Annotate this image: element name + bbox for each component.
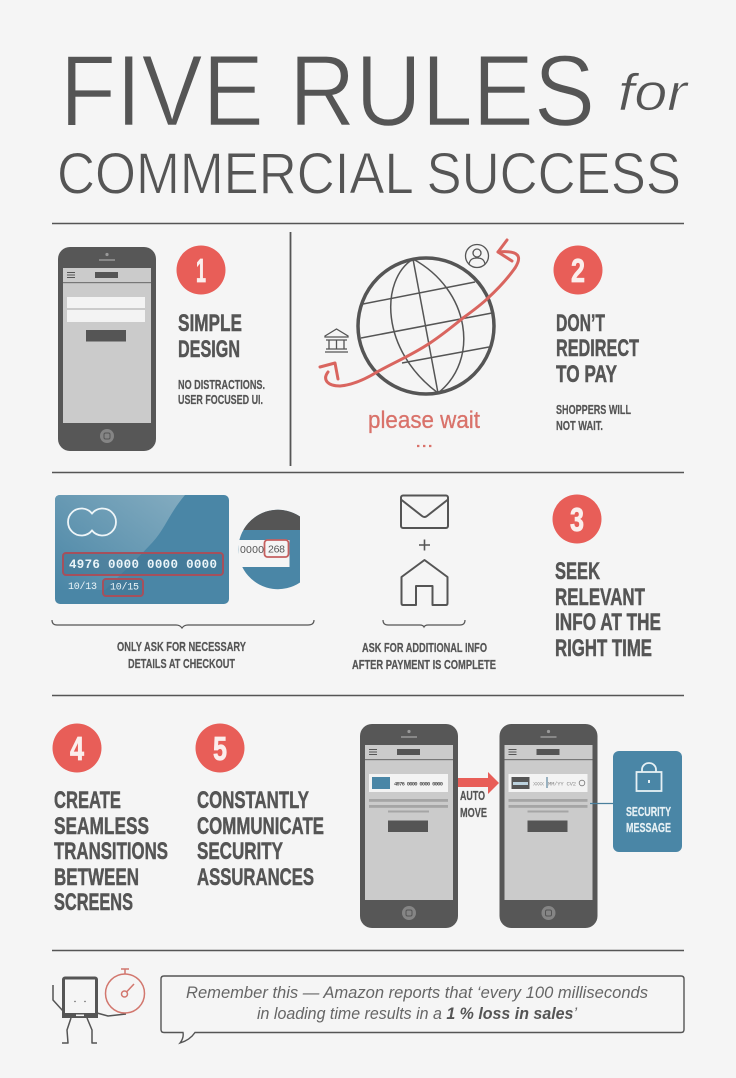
panel: rules 4 and 5 [52,724,682,928]
callout: security message: MESSAGE [626,821,671,835]
heading: don't redirect to pay: DON’T [556,310,605,337]
callout: amazon quote: Remember this — Amazon reports that ‘every 100 milliseconds [186,984,648,1002]
heading: seek relevant info: SEEK [555,558,600,585]
badge: number 4 [52,724,102,772]
text: ask for additional info: AFTER PAYMENT IS COMPLETE [352,658,496,672]
heading: seamless transitions: SEAMLESS [54,813,149,840]
heading: seamless transitions: SCREENS [54,889,133,916]
text: shoppers will not wait: SHOPPERS WILL [556,403,631,417]
arrow: redirect swoosh [320,240,519,386]
text: ask for additional info: ASK FOR ADDITIONAL INFO [362,641,487,655]
title [57,36,690,206]
badge: number 2 [554,246,602,294]
title: FIVE RULES [60,36,595,148]
heading: security assurances: COMMUNICATE [197,813,324,840]
heading: seek relevant info: RIGHT TIME [555,635,652,662]
heading: seek relevant info [555,558,661,662]
icon: tablet character [53,978,126,1043]
icon: phone with expiry and cvv: XXXX [533,780,545,788]
badge: number 5 [196,724,244,772]
text: auto move: AUTO [460,789,485,803]
text: only ask for necessary details: DETAILS AT CHECKOUT [128,657,235,671]
heading: don't redirect to pay: TO PAY [556,361,617,388]
text: only ask for necessary details: ONLY ASK FOR NECESSARY [117,640,246,654]
text: please wait: please wait [368,407,480,434]
heading: simple design [178,310,242,363]
badge: number 3 [552,494,602,544]
panel: rule 3 relevant info [52,494,661,672]
badge: number 1 [176,246,226,294]
text: no distractions: NO DISTRACTIONS. [178,378,265,392]
illustration: card back security code: 268 [268,544,285,556]
heading: don't redirect to pay [556,310,639,388]
callout: amazon quote [161,976,684,1043]
brace: additional info [383,620,465,627]
title: for [618,64,690,122]
brace: checkout details [52,620,314,628]
heading: seek relevant info: RELEVANT [555,584,645,611]
heading: don't redirect to pay: REDIRECT [556,335,639,362]
badge: number 1: 1 [196,252,206,289]
text: ask for additional info [352,641,496,672]
heading: seamless transitions: TRANSITIONS [54,838,168,865]
icon: phone with card number [360,724,458,928]
text: please wait [368,407,480,446]
panel: rule 2 don't redirect [320,240,639,446]
text: shoppers will not wait [556,403,631,433]
badge: number 4: 4 [70,730,84,767]
heading: security assurances [197,787,324,891]
illustration: credit card front: 10/15 [110,582,139,594]
icon: stopwatch [106,969,144,1013]
heading: security assurances: SECURITY [197,838,283,865]
illustration: credit card front: 4976 0000 0000 0000 [69,558,217,572]
heading: security assurances: ASSURANCES [197,864,314,891]
illustration: credit card front [55,495,229,604]
badge: number 3: 3 [570,501,584,538]
icon: house [402,560,448,605]
icon: phone with card number: 4976 0000 0000 0000 [394,780,443,788]
heading: security assurances: CONSTANTLY [197,787,309,814]
illustration: card back security code [238,510,300,590]
icon: phone with expiry and cvv [500,724,598,928]
icon: padlock [636,763,662,791]
text: only ask for necessary details [117,640,246,671]
callout: security message: SECURITY [626,805,671,819]
icon: phone with simple form [58,247,156,451]
icon: user [466,244,488,268]
heading: seek relevant info: INFO AT THE [555,609,661,636]
callout: security message [590,751,682,852]
text: no distractions: USER FOCUSED UI. [178,393,263,407]
heading: seamless transitions: BETWEEN [54,864,139,891]
text: no distractions [178,378,265,407]
heading: seamless transitions: CREATE [54,787,121,814]
heading: seamless transitions [54,787,168,916]
illustration: card back security code: 0000 [240,544,264,556]
icon: phone with expiry and cvv: MM/YY CV2 [548,780,576,788]
text: auto move: MOVE [460,806,487,820]
heading: simple design: SIMPLE [178,310,242,337]
icon: envelope [401,496,448,528]
panel: rule 1 simple design [58,246,265,451]
panel: footer remember this [53,969,684,1043]
badge: number 5: 5 [213,730,227,767]
icon: plus [419,540,430,550]
title: COMMERCIAL SUCCESS [57,142,681,206]
badge: number 2: 2 [571,252,585,289]
text: auto move [460,789,487,820]
icon: bank [325,329,348,352]
illustration: credit card front: 10/13 [68,581,97,593]
callout: amazon quote: in loading time results in a 1 % loss in sales’ [257,1005,577,1023]
arrow: auto move [458,772,499,794]
text: shoppers will not wait: NOT WAIT. [556,419,603,433]
icon: globe [358,258,494,394]
heading: simple design: DESIGN [178,336,240,363]
